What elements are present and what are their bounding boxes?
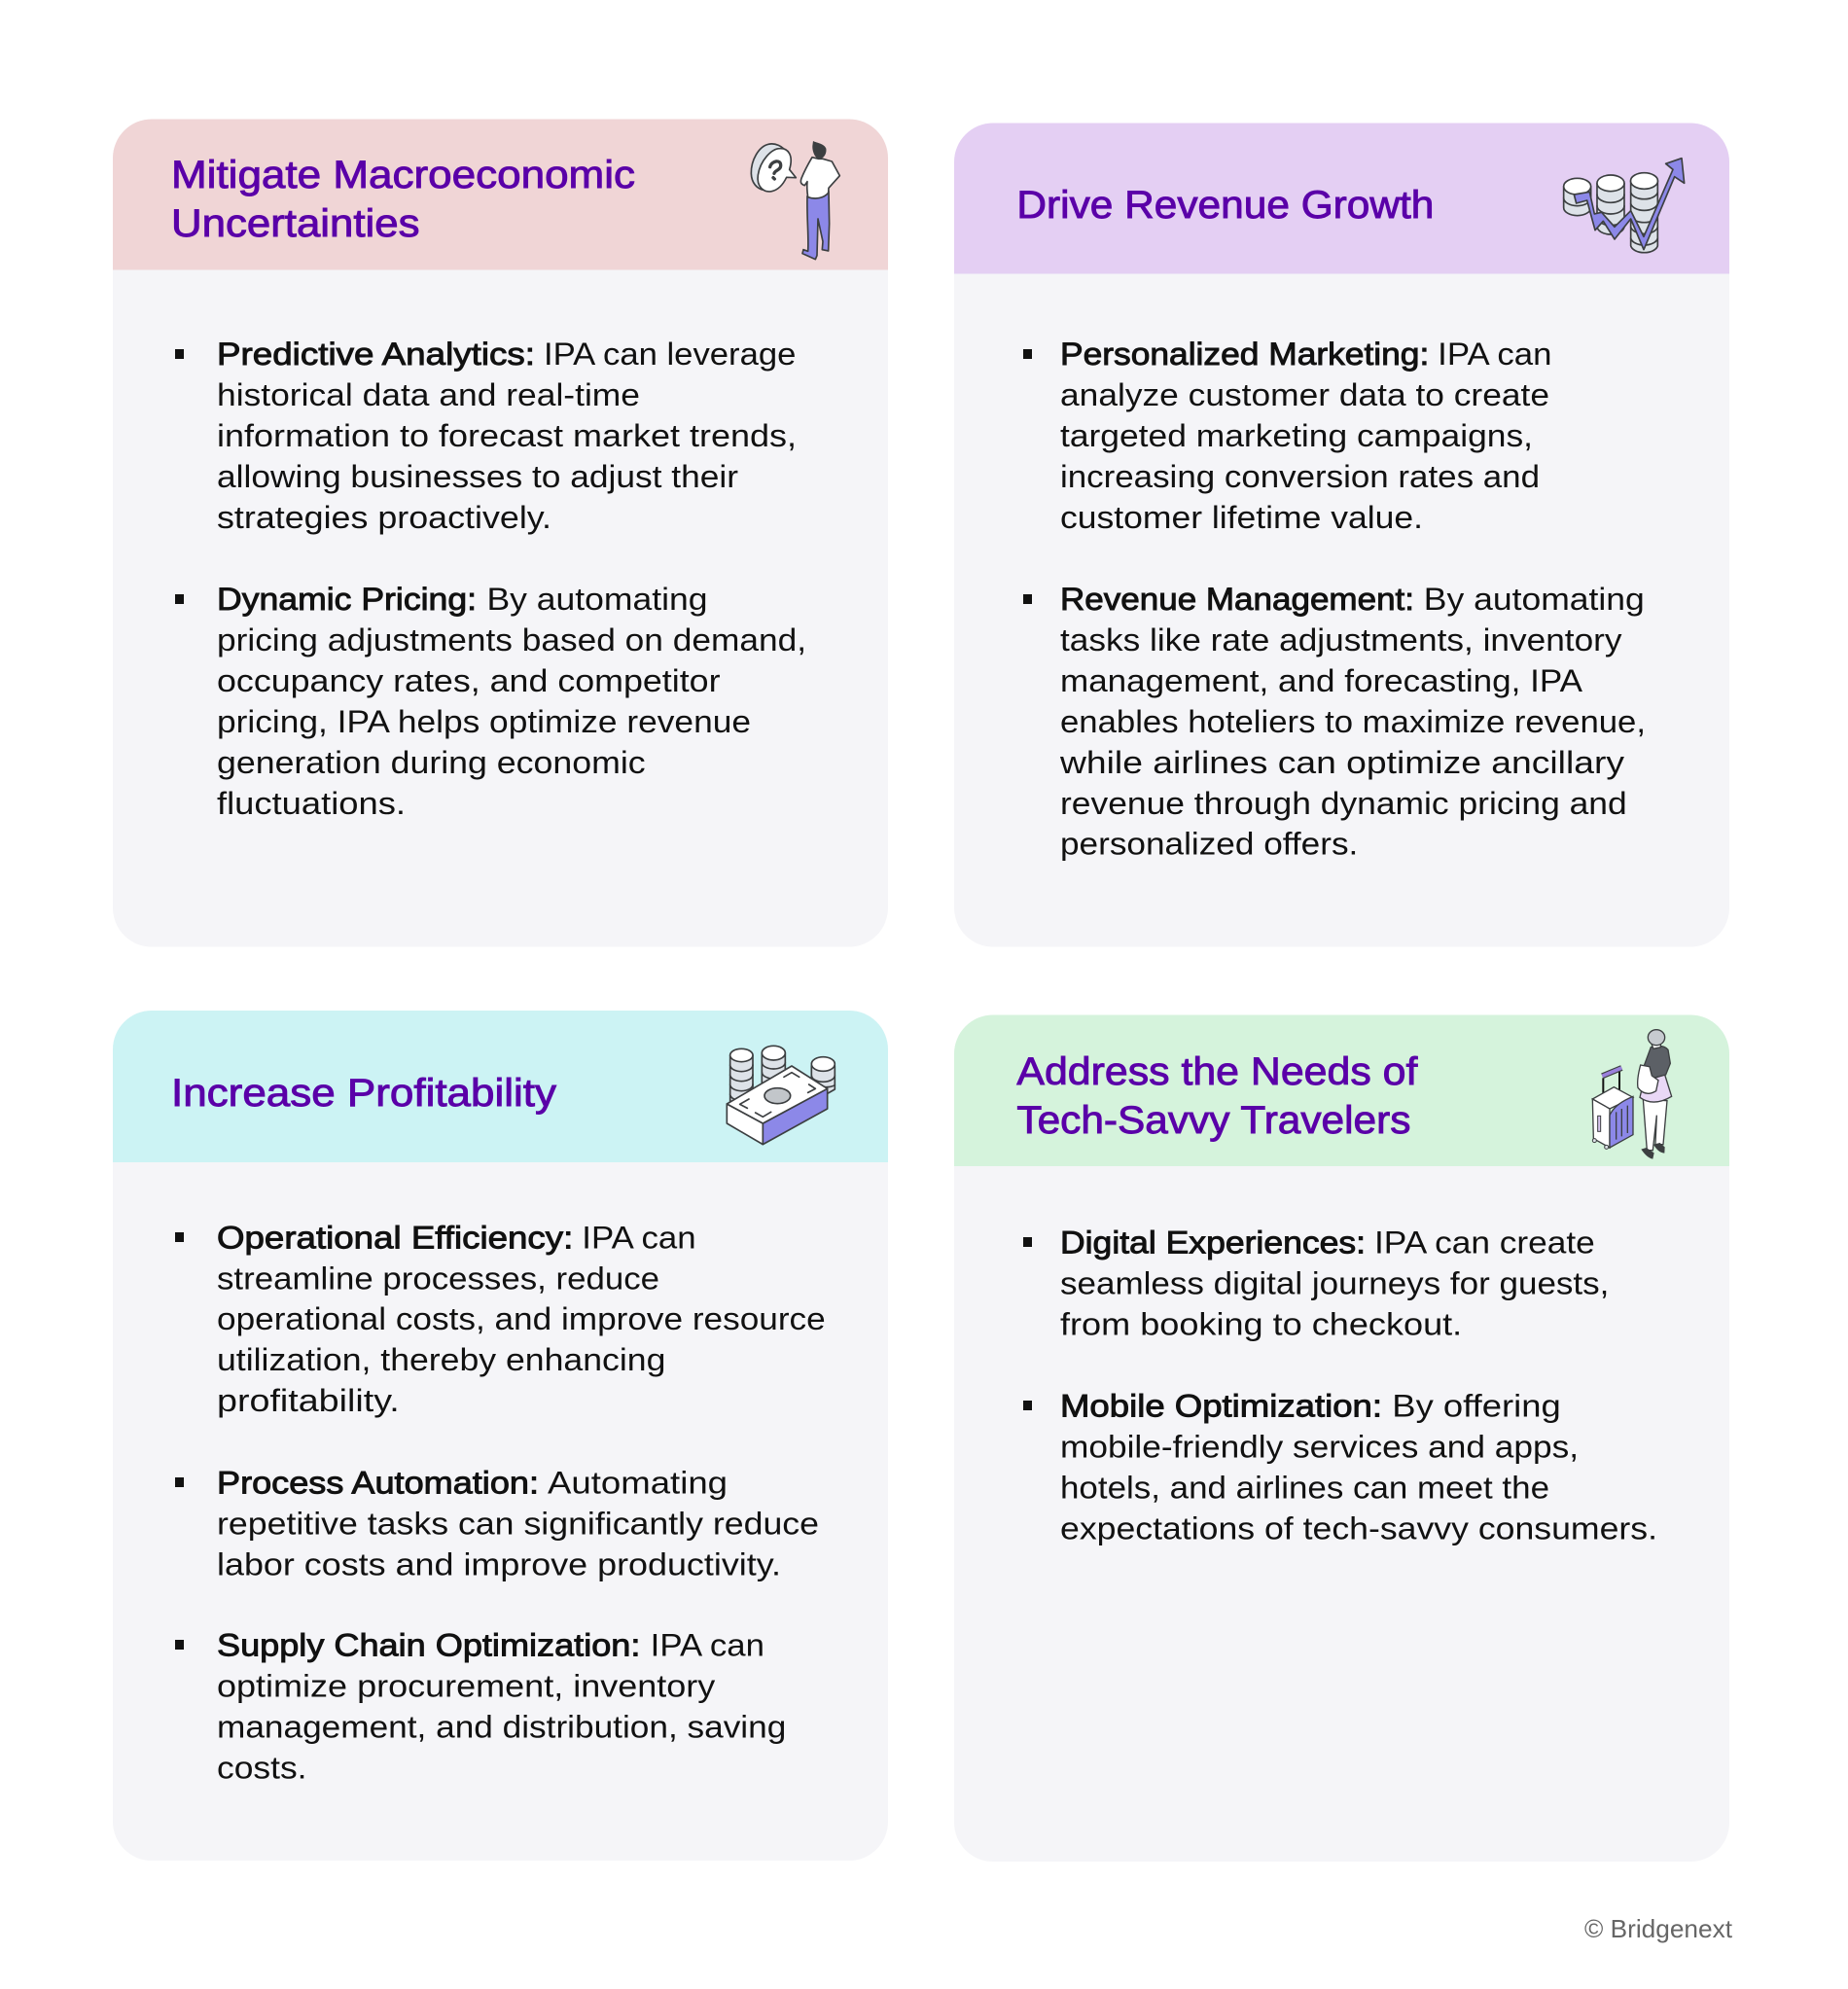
bullet: Operational Efficiency: operational costs, and improve resource — [217, 1301, 826, 1336]
panel: Increase Profitability — [113, 1011, 888, 1861]
bullet: Operational Efficiency — [175, 1220, 826, 1418]
heading — [1016, 1050, 1418, 1142]
bullet: Revenue Management: personalized offers. — [1060, 827, 1358, 862]
card header band — [113, 119, 888, 270]
bullet: Dynamic Pricing: pricing, IPA helps optimize revenue — [217, 704, 751, 739]
card body — [113, 119, 888, 947]
bullet: Revenue Management: revenue through dynamic pricing and — [1060, 786, 1627, 821]
bullet: Supply Chain Optimization: management, and distribution, saving — [217, 1709, 786, 1744]
icon: coin stacks with growth arrow — [1564, 159, 1685, 253]
bullet: Personalized Marketing: Personalized Marketing: — [1060, 337, 1429, 372]
bullet: Dynamic Pricing — [175, 582, 806, 821]
bullet: Mobile Optimization — [1023, 1388, 1657, 1545]
bullet: Predictive Analytics: Predictive Analytics: — [217, 337, 535, 372]
heading: Drive Revenue Growth — [1016, 184, 1434, 227]
bullet: Process Automation: Automating — [548, 1465, 728, 1500]
heading: Increase Profitability — [171, 1072, 556, 1115]
bullet: Personalized Marketing — [1023, 337, 1552, 535]
bullet: Revenue Management: By automating — [1424, 582, 1645, 617]
bullet: Personalized Marketing: targeted marketing campaigns, — [1060, 418, 1533, 453]
bullet: Personalized Marketing: customer lifetime value. — [1060, 500, 1423, 535]
bullet: Revenue Management: tasks like rate adjustments, inventory — [1060, 622, 1622, 657]
bullet: Mobile Optimization: By offering — [1392, 1388, 1561, 1423]
bullet: Personalized Marketing: IPA can — [1438, 337, 1552, 372]
bullet: Mobile Optimization: expectations of tech-savvy consumers. — [1060, 1510, 1657, 1545]
bullet: Supply Chain Optimization: IPA can — [651, 1627, 764, 1662]
bullet: Predictive Analytics — [175, 337, 797, 535]
bullet: Process Automation: repetitive tasks can significantly reduce — [217, 1506, 819, 1541]
bullet: Revenue Management: Revenue Management: — [1060, 582, 1414, 617]
bullet: Predictive Analytics: historical data and real-time — [217, 377, 640, 412]
bullet: Revenue Management: while airlines can optimize ancillary — [1059, 745, 1624, 780]
heading: Tech-Savvy Travelers — [1016, 1099, 1410, 1142]
bullet: Supply Chain Optimization: costs. — [217, 1750, 307, 1785]
bullet: Supply Chain Optimization: optimize procurement, inventory — [217, 1668, 715, 1703]
card header band — [954, 123, 1729, 274]
panel: Mitigate Macroeconomic Uncertainties — [113, 119, 888, 947]
footer credit: © Bridgenext — [1584, 1914, 1733, 1943]
icon: banknote stack and coins — [727, 1046, 835, 1145]
bullet: Dynamic Pricing: generation during economic — [217, 745, 646, 780]
bullet: Process Automation: labor costs and improve productivity. — [217, 1546, 781, 1581]
bullet: Operational Efficiency: streamline processes, reduce — [217, 1261, 659, 1296]
bullet: Operational Efficiency: Operational Efficiency: — [217, 1220, 573, 1255]
bullet: Supply Chain Optimization — [175, 1627, 786, 1785]
bullet: Digital Experiences: seamless digital journeys for guests, — [1060, 1265, 1609, 1300]
bullet: Digital Experiences: from booking to checkout. — [1060, 1306, 1462, 1341]
bullet: Revenue Management — [1023, 582, 1646, 862]
bullet: Process Automation — [175, 1465, 819, 1581]
bullet: Supply Chain Optimization: Supply Chain Optimization: — [217, 1627, 640, 1662]
bullet: Dynamic Pricing: pricing adjustments based on demand, — [217, 622, 806, 657]
icon: traveler with suitcase — [1592, 1030, 1672, 1159]
bullet: Personalized Marketing: analyze customer data to create — [1060, 377, 1549, 412]
card body — [954, 123, 1729, 947]
heading — [171, 154, 635, 245]
bullet: Operational Efficiency: profitability. — [217, 1383, 400, 1418]
bullet: Process Automation: Process Automation: — [217, 1465, 539, 1500]
bullet: Operational Efficiency: utilization, thereby enhancing — [217, 1342, 665, 1377]
bullet: Digital Experiences: Digital Experiences: — [1060, 1225, 1366, 1260]
bullet: Dynamic Pricing: fluctuations. — [217, 786, 406, 821]
card header band — [954, 1015, 1729, 1166]
card body — [954, 1015, 1729, 1862]
card header band — [113, 1011, 888, 1162]
bullet: Operational Efficiency: IPA can — [582, 1220, 696, 1255]
bullet: Digital Experiences — [1023, 1225, 1609, 1341]
panel: Address the Needs of Tech-Savvy Travelers — [954, 1015, 1729, 1862]
heading: Address the Needs of — [1016, 1050, 1418, 1093]
bullet: Personalized Marketing: increasing conversion rates and — [1060, 459, 1540, 494]
bullet: Dynamic Pricing: occupancy rates, and competitor — [217, 663, 721, 698]
bullet: Digital Experiences: IPA can create — [1374, 1225, 1595, 1260]
card body — [113, 1011, 888, 1861]
panel: Drive Revenue Growth — [954, 123, 1729, 947]
heading: Mitigate Macroeconomic — [171, 154, 635, 196]
bullet: Revenue Management: enables hoteliers to maximize revenue, — [1060, 704, 1646, 739]
heading: Uncertainties — [171, 202, 420, 245]
bullet: Predictive Analytics: information to forecast market trends, — [217, 418, 797, 453]
bullet: Dynamic Pricing: Dynamic Pricing: — [217, 582, 477, 617]
bullet: Mobile Optimization: mobile-friendly services and apps, — [1060, 1429, 1579, 1464]
bullet: Predictive Analytics: strategies proactively. — [217, 500, 551, 535]
bullet: Mobile Optimization: Mobile Optimization: — [1060, 1388, 1382, 1423]
bullet: Predictive Analytics: allowing businesses to adjust their — [217, 459, 738, 494]
bullet: Predictive Analytics: IPA can leverage — [544, 337, 796, 372]
bullet: Revenue Management: management, and forecasting, IPA — [1060, 663, 1583, 698]
bullet: Dynamic Pricing: By automating — [486, 582, 708, 617]
bullet: Mobile Optimization: hotels, and airlines can meet the — [1060, 1470, 1549, 1505]
icon: person with question bubble — [751, 141, 839, 260]
